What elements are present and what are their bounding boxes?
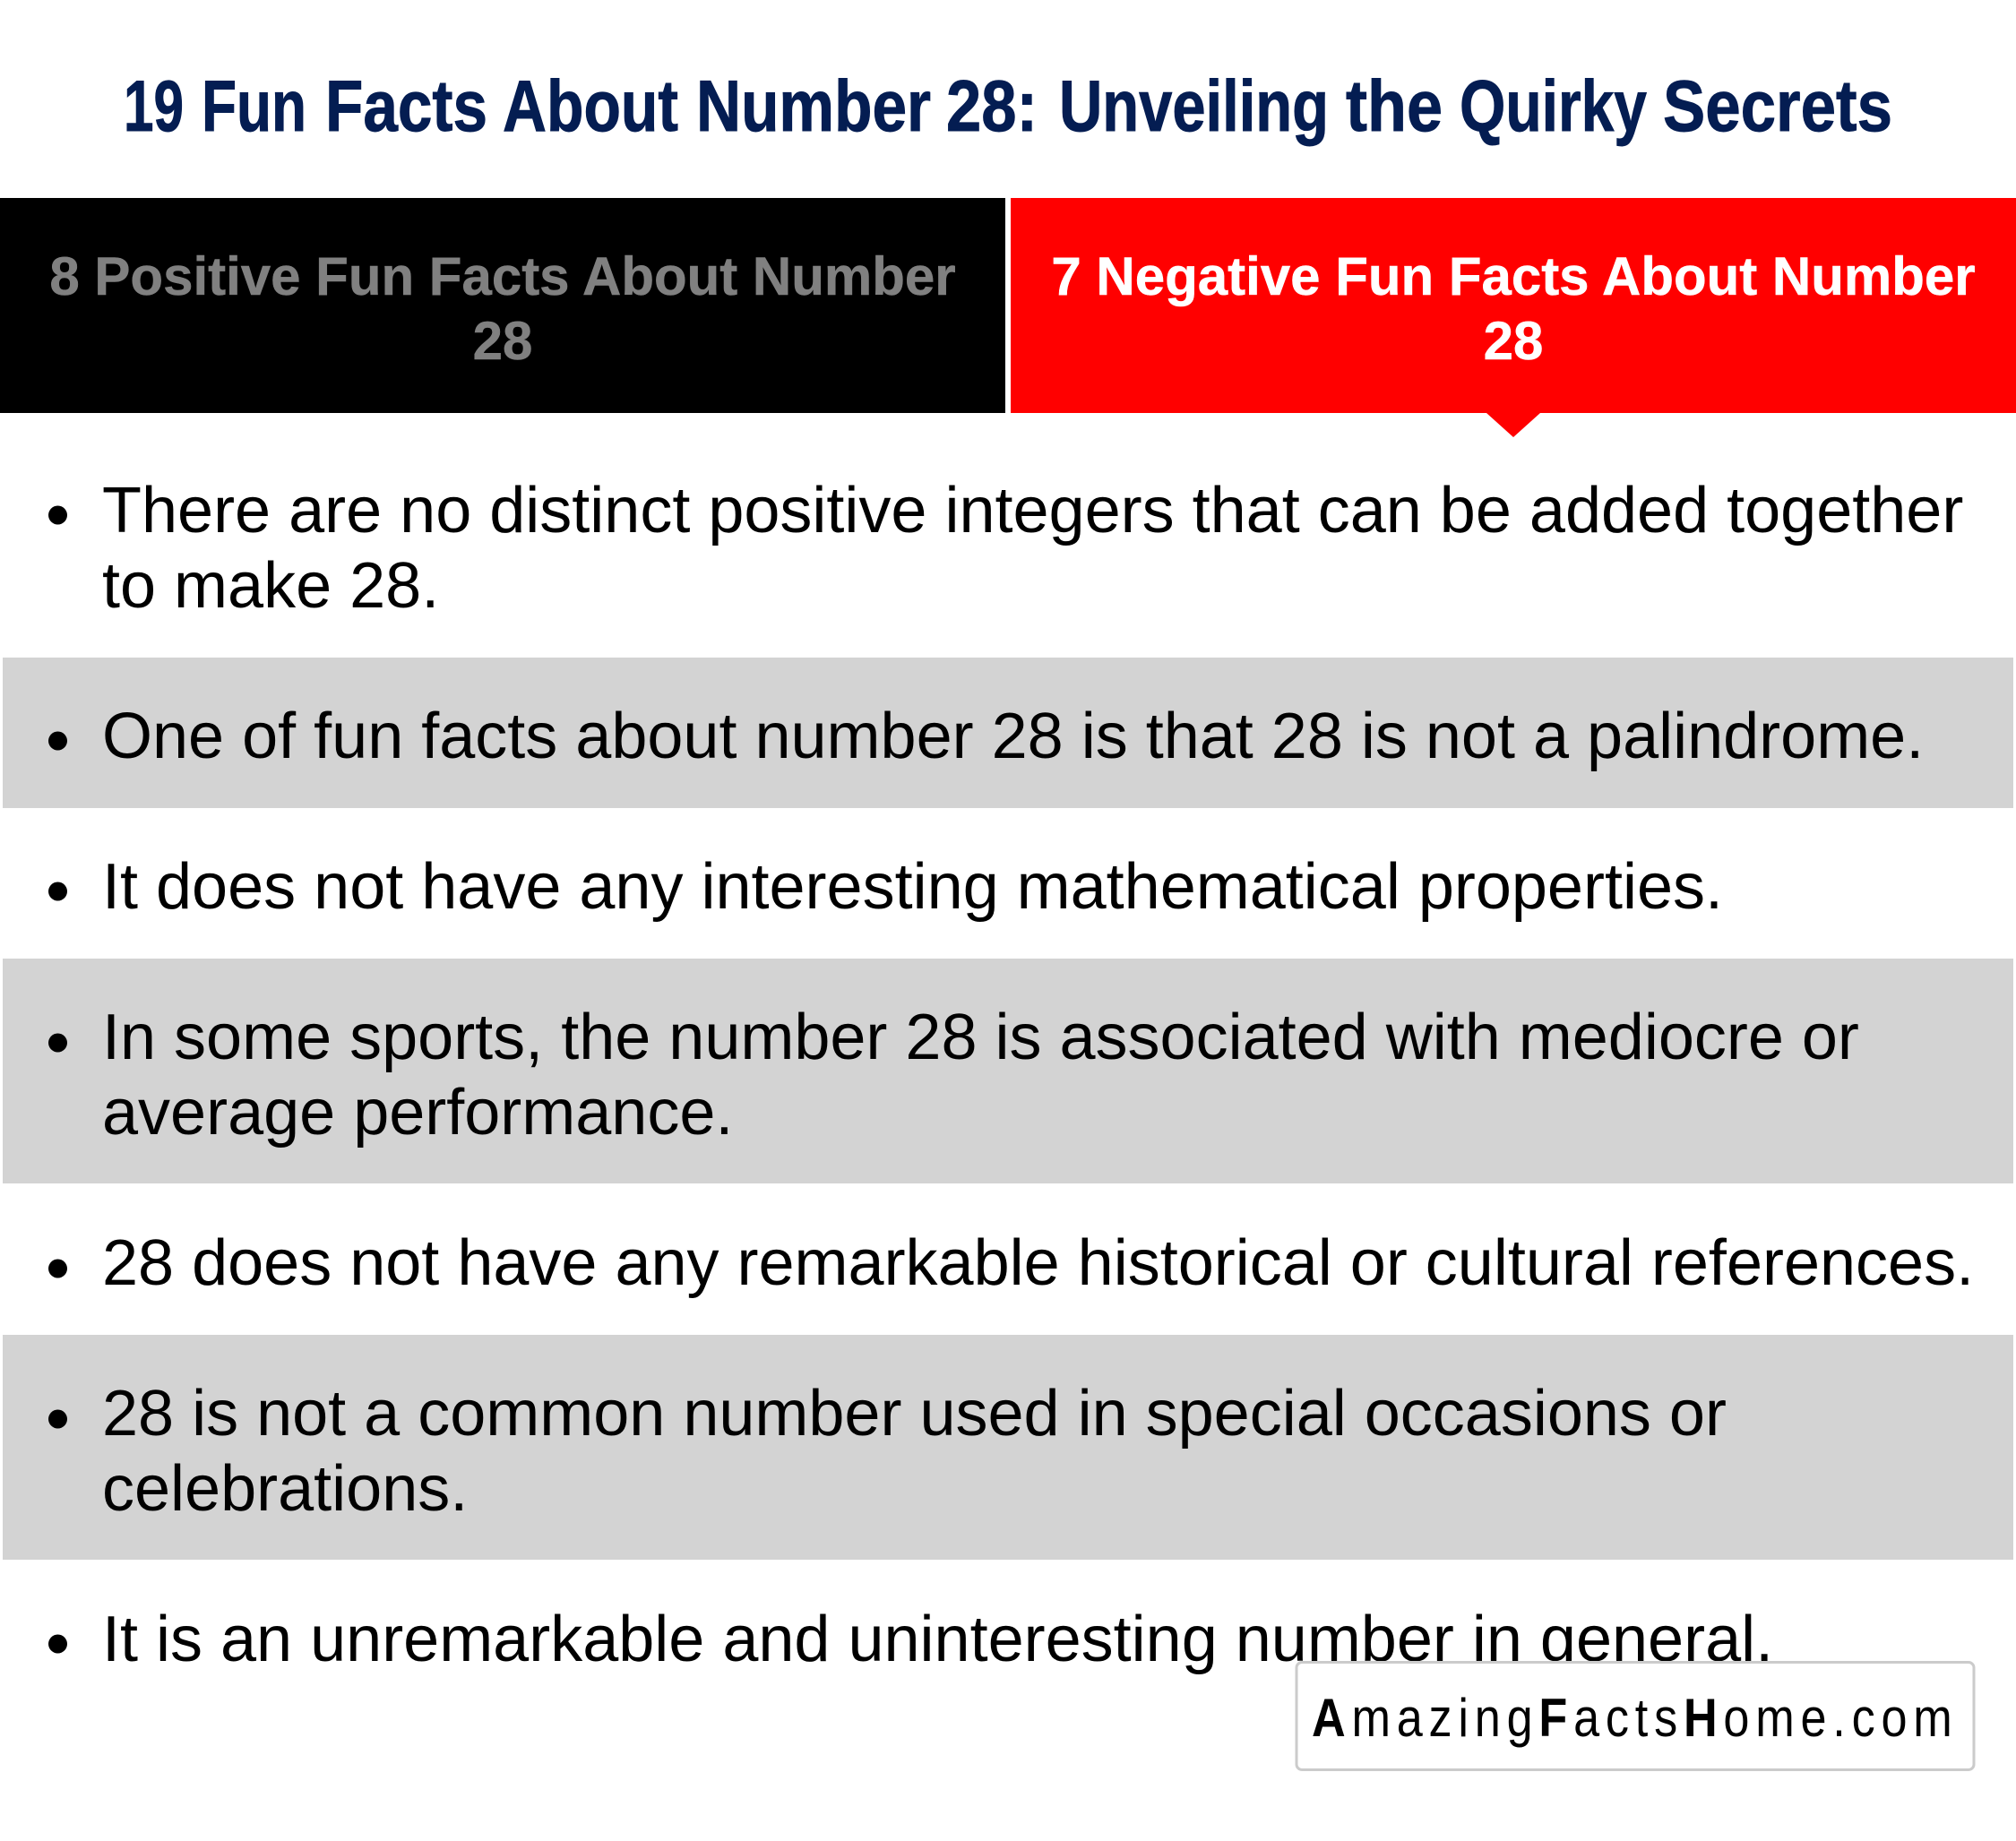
title: About: [503, 66, 678, 147]
watermark badge: AmazingFactsHome.com: [1312, 1688, 1959, 1748]
fact row 4: average performance.: [102, 1077, 733, 1148]
fact row 1: to make 28.: [102, 550, 439, 622]
fact row 4: In some sports, the number 28 is associated with mediocre or: [102, 1002, 1859, 1073]
fact row 4: [3, 959, 2013, 1183]
fact row 7: It is an unremarkable and uninteresting number in general.: [102, 1604, 1773, 1675]
fact row 3: It does not have any interesting mathematical properties.: [102, 851, 1723, 923]
tab: negative facts (active): 7 Negative Fun Facts About Number: [1051, 246, 1976, 306]
fact row 6: 28 is not a common number used in special occasions or: [102, 1378, 1727, 1450]
title: Secrets: [1663, 66, 1892, 147]
fact row 2: One of fun facts about number 28 is that 28 is not a palindrome.: [102, 701, 1924, 772]
title: Number: [696, 66, 931, 147]
fact row 6: [3, 1335, 2013, 1560]
tab: positive facts (inactive): 8 Positive Fun Facts About Number: [49, 246, 956, 306]
title: 28:: [946, 66, 1038, 147]
fact row 2: [3, 658, 2013, 808]
title: Unveiling: [1059, 66, 1329, 147]
fact row 1: There are no distinct positive integers that can be added together: [102, 475, 1963, 546]
watermark badge: [1297, 1663, 1974, 1770]
tab: positive facts (inactive): [0, 198, 1005, 413]
tab: positive facts (inactive): 28: [473, 311, 532, 371]
title: Fun: [202, 66, 306, 147]
title: [124, 66, 1892, 147]
tab: negative facts (active): 28: [1484, 311, 1543, 371]
fact row 1: [48, 475, 1963, 622]
title: the: [1346, 66, 1443, 147]
fact row 5: 28 does not have any remarkable historical or cultural references.: [102, 1227, 1974, 1299]
title: 19: [124, 66, 184, 147]
tab: negative facts (active): [1011, 198, 2016, 437]
title: Facts: [325, 66, 487, 147]
fact row 6: celebrations.: [102, 1453, 468, 1525]
title: Quirky: [1460, 66, 1647, 147]
